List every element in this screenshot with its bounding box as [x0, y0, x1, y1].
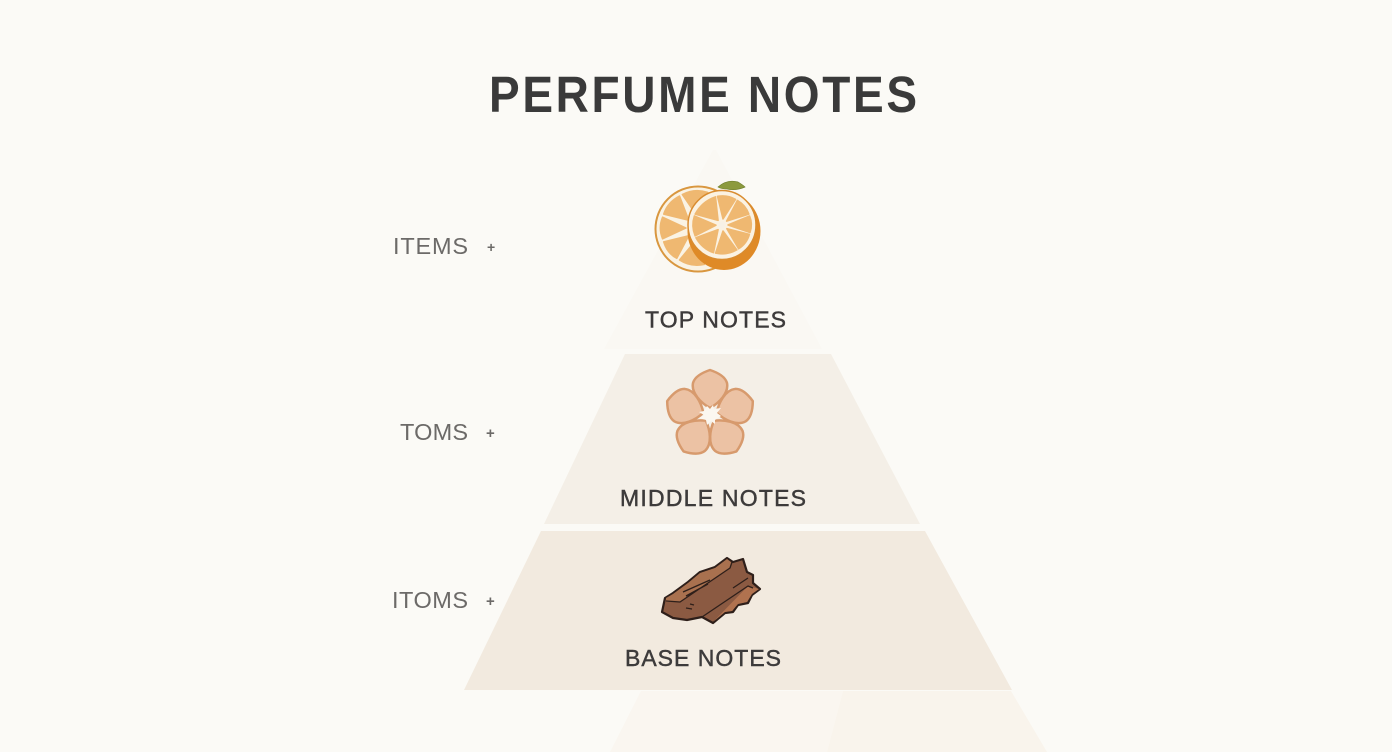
icon: wood bark	[662, 558, 760, 623]
label: middle notes: MIDDLE NOTES	[620, 485, 806, 511]
left label: toms: +	[486, 425, 495, 442]
left label: items: ITEMS	[393, 233, 468, 259]
left label: items: +	[487, 239, 495, 255]
petal left	[662, 385, 709, 429]
pyramid tier: base notes	[464, 531, 1012, 690]
title: PERFUME NOTES	[489, 67, 917, 124]
label: base notes: BASE NOTES	[625, 645, 781, 671]
pyramid tier: top notes	[604, 150, 822, 349]
petal lower left	[670, 411, 720, 462]
bark body	[662, 558, 760, 623]
icon: flower	[662, 370, 758, 462]
leaf	[718, 181, 745, 190]
petal right	[711, 385, 758, 429]
flower centre	[699, 405, 721, 425]
front orange half	[688, 190, 760, 270]
back orange slice	[656, 186, 740, 272]
bark grain lines	[666, 562, 753, 617]
bark lower face	[713, 586, 759, 622]
petal top	[693, 370, 727, 408]
bark top face	[666, 559, 732, 602]
faint lower pyramid tier	[610, 691, 1047, 752]
icon: orange slices	[656, 181, 760, 272]
petal lower right	[700, 411, 750, 462]
label: top notes: TOP NOTES	[645, 306, 786, 332]
pyramid tier: middle notes	[544, 354, 920, 524]
left label: itoms: ITOMS	[392, 587, 468, 613]
left label: itoms: +	[486, 593, 495, 610]
left label: toms: TOMS	[400, 419, 468, 445]
